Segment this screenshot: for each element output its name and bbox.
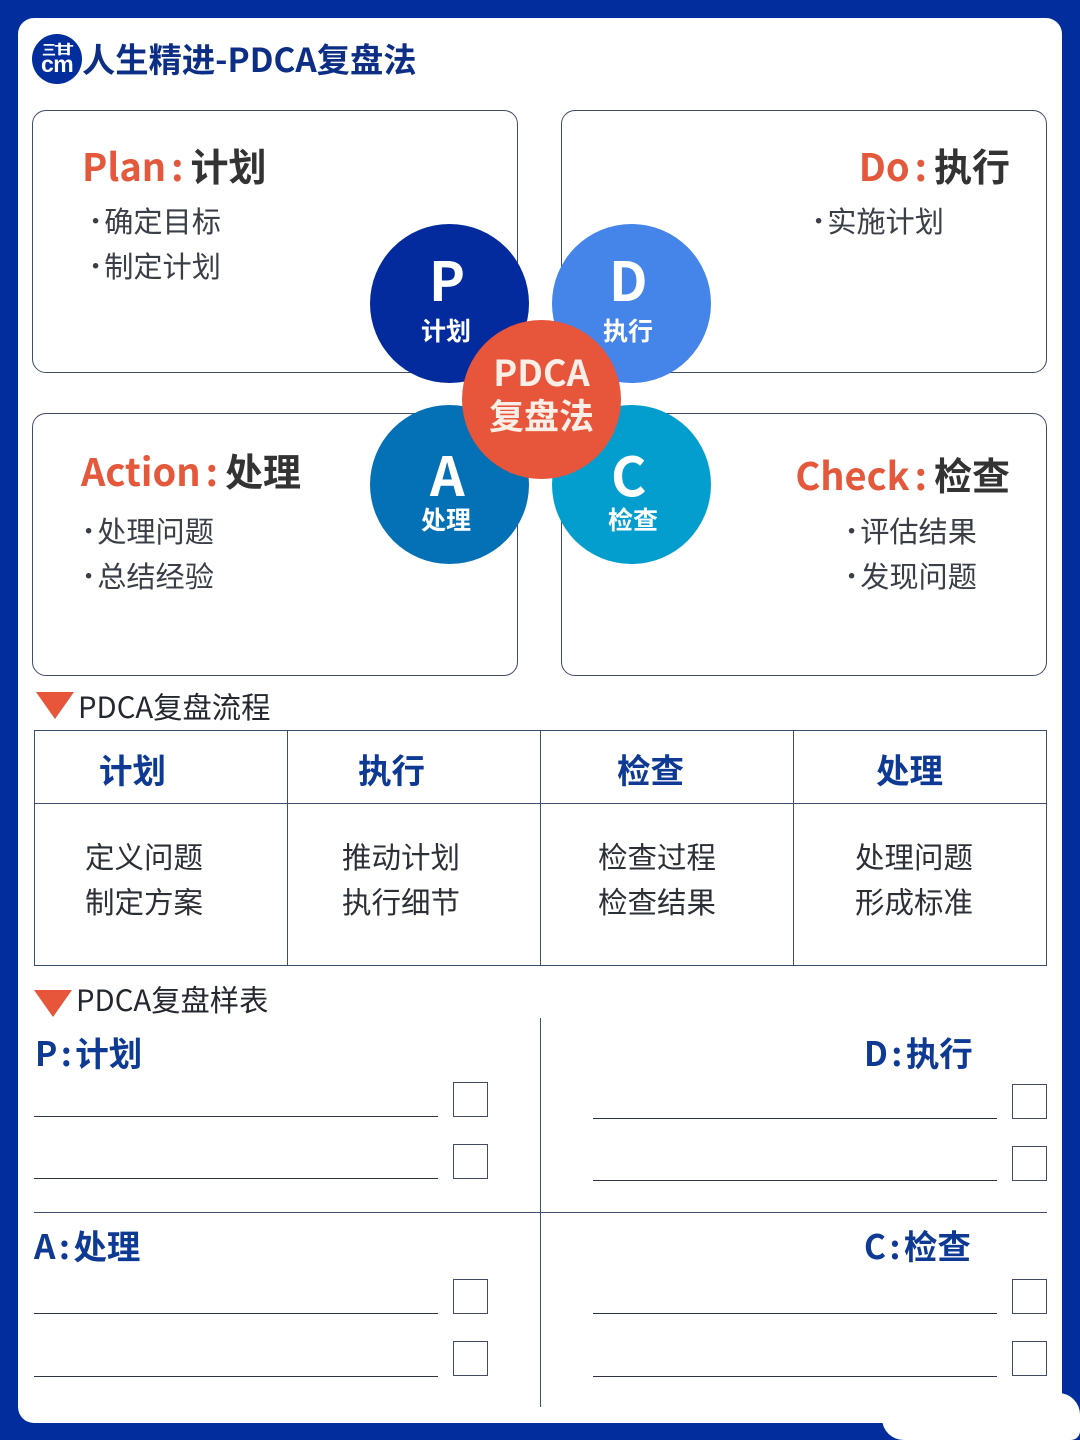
circle D: D (609, 238, 648, 317)
triangle marker: process (36, 692, 74, 719)
sample: plan: P:计划 (35, 1027, 142, 1076)
sample: plan (34, 1027, 488, 1179)
title: 人生精进-PDCA复盘法 (82, 33, 417, 82)
table: process: 定义问题 制定方案 (85, 835, 203, 922)
sample: do (593, 1027, 1047, 1181)
circle center (462, 320, 621, 479)
circle C: C (611, 433, 646, 512)
plan list: ·制定计划 (81, 244, 221, 286)
section heading: sample: PDCA复盘样表 (76, 978, 268, 1020)
circle C: 检查 (608, 501, 658, 537)
triangle marker: sample (34, 990, 72, 1017)
table: process: 检查 (617, 744, 684, 793)
action list: ·总结经验 (74, 554, 214, 596)
table: process: 计划 (99, 744, 166, 793)
circle D: 执行 (603, 312, 653, 348)
table: process: 执行 (358, 744, 425, 793)
circle A: A (430, 433, 465, 512)
action heading: Action:处理 (81, 442, 301, 497)
circle A: 处理 (421, 501, 471, 537)
table: process: 处理 (876, 744, 943, 793)
logo badge: 三 (42, 40, 56, 60)
section heading: process: PDCA复盘流程 (78, 685, 270, 727)
sample: check: C:检查 (864, 1220, 971, 1269)
panel: plan (32, 110, 518, 373)
logo badge (32, 34, 82, 84)
plan list (81, 199, 221, 286)
white blob bottom right (882, 1393, 1080, 1440)
check heading: Check:检查 (795, 446, 1010, 501)
sample: action (34, 1220, 488, 1377)
do list: ·实施计划 (804, 199, 944, 241)
sample: do: D:执行 (864, 1027, 973, 1076)
sample dividers (34, 1018, 1047, 1407)
circle C (552, 405, 711, 564)
circle D (552, 224, 711, 383)
plan heading: Plan:计划 (82, 137, 267, 192)
check list: ·发现问题 (837, 554, 977, 596)
circle P: 计划 (421, 312, 471, 348)
table: process: 检查过程 检查结果 (598, 835, 716, 922)
circle center: PDCA (493, 345, 590, 397)
circle P (370, 224, 529, 383)
action list: ·处理问题 (74, 509, 214, 551)
table: process (34, 730, 1047, 966)
check list: ·评估结果 (837, 509, 977, 551)
check list (837, 509, 977, 596)
sample: action: A:处理 (34, 1220, 140, 1269)
panel: action (32, 413, 518, 676)
do heading: Do:执行 (859, 137, 1010, 192)
plan list: ·确定目标 (81, 199, 221, 241)
logo badge: 甘 (54, 39, 74, 58)
sample: check (593, 1220, 1047, 1377)
logo badge: cm (41, 51, 73, 77)
action list (74, 509, 214, 596)
panel: check (561, 413, 1047, 676)
circle P: P (429, 238, 465, 317)
panel: do (561, 110, 1047, 373)
table: process: 推动计划 执行细节 (342, 835, 460, 922)
table: process: 处理问题 形成标准 (855, 835, 973, 922)
circle center: 复盘法 (489, 389, 594, 440)
circle A (370, 405, 529, 564)
